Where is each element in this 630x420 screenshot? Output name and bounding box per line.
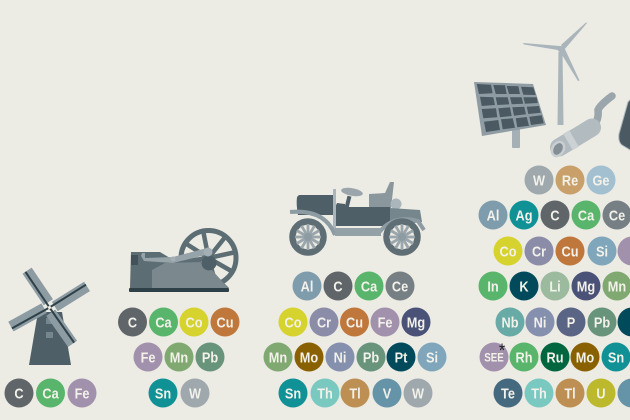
column: windmill elements: Ca — [42, 384, 59, 402]
column: windmill elements — [4, 378, 96, 408]
column: car elements: Sn — [285, 384, 301, 402]
column: modern technology elements: Co — [500, 242, 516, 260]
icon: steam engine — [129, 230, 236, 292]
column: modern technology elements: Re — [562, 171, 578, 189]
column: modern technology elements: Sn — [608, 348, 624, 366]
column: modern technology elements: Mg — [577, 277, 595, 295]
column: modern technology elements: Nb — [502, 313, 518, 331]
column: steam engine elements: C — [128, 313, 137, 331]
column: steam engine elements: Pb — [202, 348, 218, 366]
column: car elements: Th — [317, 384, 333, 402]
column: car elements: Pb — [363, 348, 379, 366]
column: modern technology elements: Al — [487, 206, 499, 224]
column: car elements: Al — [301, 277, 313, 295]
icon: windmill — [8, 268, 90, 365]
column: steam engine elements: Fe — [141, 348, 156, 366]
column: modern technology elements: Ge — [593, 171, 610, 189]
column: car elements: Mg — [407, 313, 425, 331]
column: modern technology elements: P — [567, 313, 575, 331]
column: modern technology elements: K — [519, 277, 529, 295]
column: steam engine elements: Sn — [155, 384, 171, 402]
column: modern technology elements: Ca — [578, 206, 594, 224]
column: modern technology elements: U — [596, 384, 606, 402]
column: modern technology elements: Ru — [547, 348, 563, 366]
column: car elements: Si — [426, 348, 438, 366]
column: car elements: Tl — [349, 384, 361, 402]
column: windmill elements: C — [14, 384, 24, 402]
column: modern technology elements: SEE — [484, 352, 504, 365]
column: steam engine elements: W — [189, 384, 202, 402]
column: modern technology elements: Si — [596, 242, 608, 260]
column: modern technology elements: Te — [501, 384, 515, 402]
column: car elements: Cr — [317, 313, 332, 331]
column: car elements: Co — [285, 313, 301, 331]
column: modern technology elements: Li — [549, 277, 561, 295]
column: car elements: Cu — [346, 313, 363, 331]
icon: wind turbine — [523, 22, 587, 125]
column: car elements: Ca — [361, 277, 377, 295]
column: modern technology elements: Pb — [594, 313, 610, 331]
column: modern technology elements: C — [550, 206, 560, 224]
column: modern technology elements: In — [487, 277, 499, 295]
column: car elements: Ni — [334, 348, 346, 366]
column: modern technology elements: Ag — [516, 206, 532, 224]
column: car elements: W — [412, 384, 425, 402]
column: modern technology elements: Th — [531, 384, 547, 402]
column: modern technology elements: Ce — [609, 206, 625, 224]
column: steam engine elements: Ca — [155, 313, 172, 331]
icon: vintage car — [290, 182, 424, 252]
column: car elements — [264, 272, 446, 408]
column: car elements: Ce — [392, 277, 408, 295]
icon: smartphone — [619, 98, 630, 151]
column: modern technology elements — [478, 166, 630, 408]
column: steam engine elements: Cu — [217, 313, 233, 331]
column: car elements: V — [383, 384, 392, 402]
column: car elements: C — [333, 277, 343, 295]
column: steam engine elements — [118, 308, 240, 408]
column: modern technology elements: * — [499, 340, 505, 361]
column: car elements: Fe — [378, 313, 393, 331]
column: modern technology elements: Tl — [564, 384, 576, 402]
column: car elements: Pt — [395, 348, 408, 366]
column: modern technology elements: Rh — [516, 348, 532, 366]
column: modern technology elements: Mn — [608, 277, 626, 295]
icon: solar panel — [474, 82, 546, 148]
column: steam engine elements: Co — [186, 313, 202, 331]
icon: catalytic converter — [549, 96, 612, 158]
column: windmill elements: Fe — [75, 384, 90, 402]
column: car elements: Mn — [269, 348, 287, 366]
column: car elements: Mo — [300, 348, 318, 366]
column: steam engine elements: Mn — [170, 348, 188, 366]
column: modern technology elements: Cu — [562, 242, 578, 260]
column: modern technology elements: Cr — [532, 242, 547, 260]
column: modern technology elements: Mo — [576, 348, 594, 366]
column: modern technology elements: W — [533, 171, 546, 189]
column: modern technology elements: Ni — [534, 313, 546, 331]
